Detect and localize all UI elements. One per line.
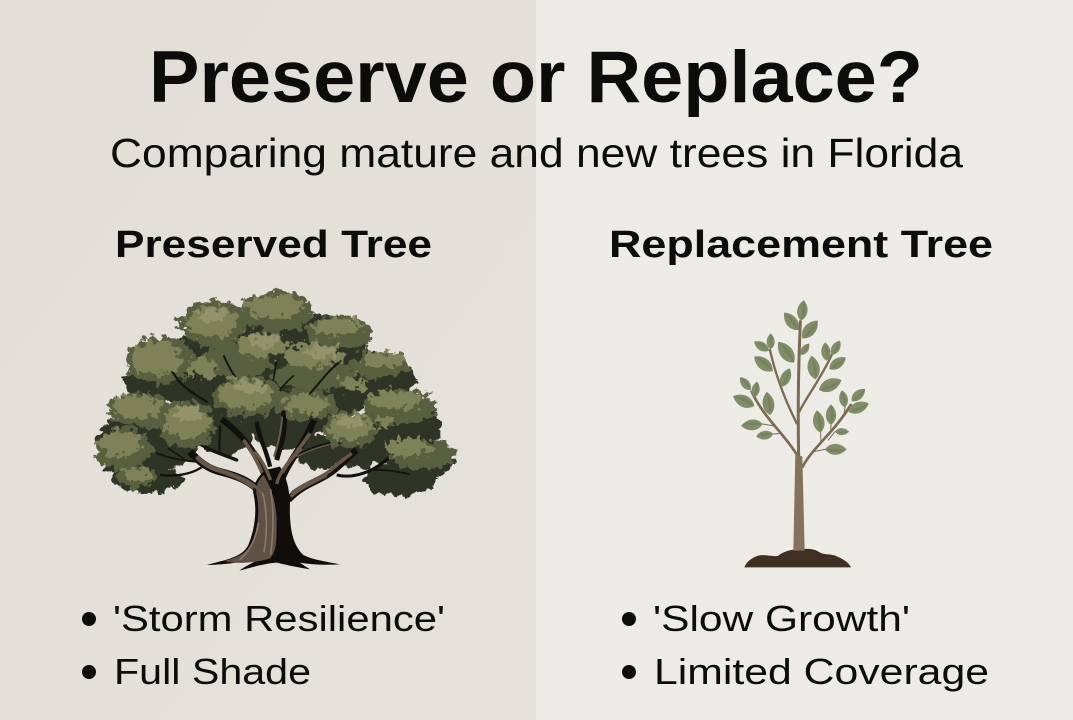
- panel: replacement tree background: [536, 0, 1073, 720]
- list item: storm resilience: 'Storm Resilience': [113, 598, 445, 639]
- branches: [752, 322, 851, 467]
- heading: replacement tree: Replacement Tree: [609, 224, 993, 266]
- leaves: [731, 300, 871, 455]
- list item: limited coverage: Limited Coverage: [654, 651, 989, 692]
- limb junction highlights: [223, 448, 327, 497]
- trunk brown highlights: [224, 475, 277, 563]
- list item: slow growth: 'Slow Growth': [653, 598, 910, 639]
- list item: full shade: Full Shade: [114, 651, 311, 692]
- list: replacement tree drawbacks: [622, 598, 989, 692]
- canopy upper dark branches: [172, 356, 338, 402]
- trunk and roots: [207, 467, 340, 571]
- panel: preserved tree background: [0, 0, 536, 720]
- canopy mid-tone foliage: [97, 293, 453, 486]
- heading: preserved tree: Preserved Tree: [115, 224, 432, 266]
- soil mound: [744, 549, 851, 567]
- icon: mature oak tree: [97, 293, 453, 571]
- canopy highlight foliage: [101, 297, 430, 480]
- bullet: [622, 665, 636, 679]
- bullet: [82, 612, 96, 626]
- trunk light streaks: [240, 490, 273, 559]
- list: preserved tree benefits: [82, 598, 445, 692]
- limbs brown highlights: [197, 417, 352, 497]
- trunk: [793, 453, 805, 551]
- bullet: [82, 665, 96, 679]
- canopy shadow layer: [100, 310, 452, 495]
- limbs outline: [160, 410, 390, 500]
- icon: young sapling: [731, 300, 871, 567]
- bullet: [622, 612, 636, 626]
- title: Preserve or Replace?: [149, 37, 923, 118]
- subtitle: Comparing mature and new trees in Florida: [110, 130, 963, 176]
- thin dark branches: [157, 427, 408, 474]
